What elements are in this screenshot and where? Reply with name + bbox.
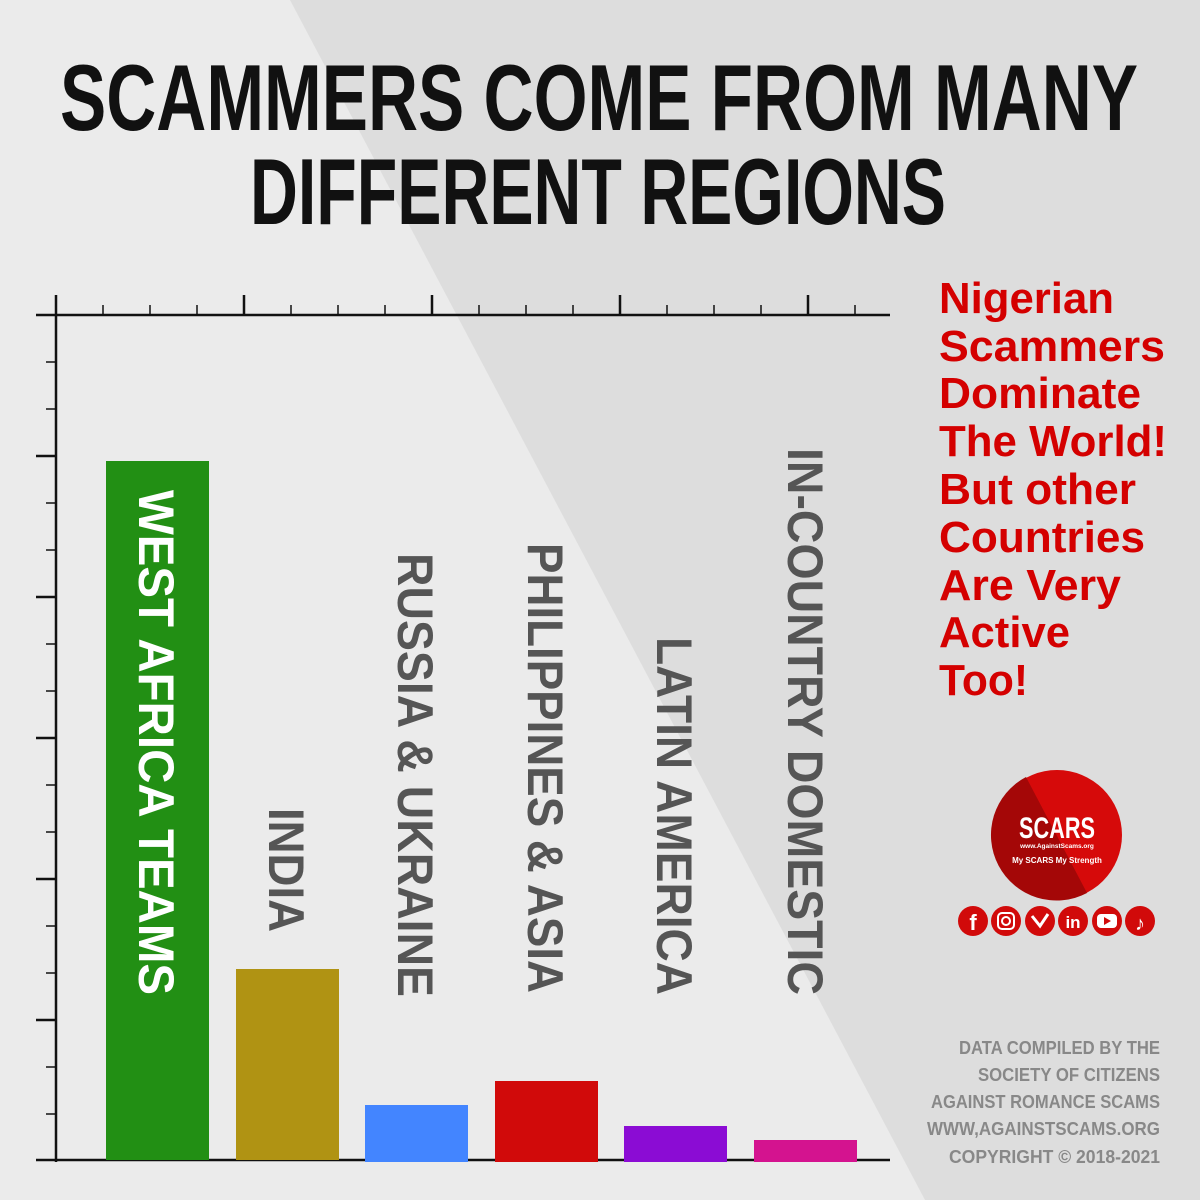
callout text: The World! <box>939 417 1167 466</box>
credits text: DATA COMPILED BY THE <box>959 1038 1160 1058</box>
social icons: in <box>1065 913 1081 932</box>
logo: SCARS <box>991 770 1122 901</box>
bar labels: LATIN AMERICA <box>646 637 702 995</box>
title <box>60 45 1138 244</box>
bar labels <box>128 448 833 997</box>
bar labels: PHILIPPINES & ASIA <box>517 543 573 993</box>
credits text: AGAINST ROMANCE SCAMS <box>931 1092 1160 1112</box>
credits text <box>927 1038 1160 1167</box>
bar labels: RUSSIA & UKRAINE <box>387 553 443 997</box>
bar labels: WEST AFRICA TEAMS <box>128 490 184 995</box>
social icons <box>958 906 1155 936</box>
callout text: Nigerian <box>939 274 1114 323</box>
callout text: Countries <box>939 513 1145 562</box>
logo: SCARS: SCARS <box>1019 812 1095 845</box>
chart axes <box>36 295 890 1162</box>
credits text: COPYRIGHT © 2018-2021 <box>949 1147 1160 1167</box>
callout text: Active <box>939 608 1070 657</box>
logo: SCARS: My SCARS My Strength <box>1012 856 1102 865</box>
bar labels: INDIA <box>258 808 314 932</box>
bar chart <box>106 461 857 1162</box>
bar labels: IN-COUNTRY DOMESTIC <box>777 448 833 995</box>
logo: SCARS: www.AgainstScams.org <box>1019 843 1094 850</box>
callout text: Dominate <box>939 369 1141 418</box>
callout text: Scammers <box>939 322 1165 371</box>
social icons: ♪ <box>1135 913 1145 935</box>
social icons: f <box>969 910 977 935</box>
callout text: But other <box>939 465 1136 514</box>
callout text: Are Very <box>939 561 1122 610</box>
credits text: WWW,AGAINSTSCAMS.ORG <box>927 1119 1160 1139</box>
credits text: SOCIETY OF CITIZENS <box>978 1065 1160 1085</box>
callout text <box>939 274 1167 705</box>
callout text: Too! <box>939 656 1028 705</box>
